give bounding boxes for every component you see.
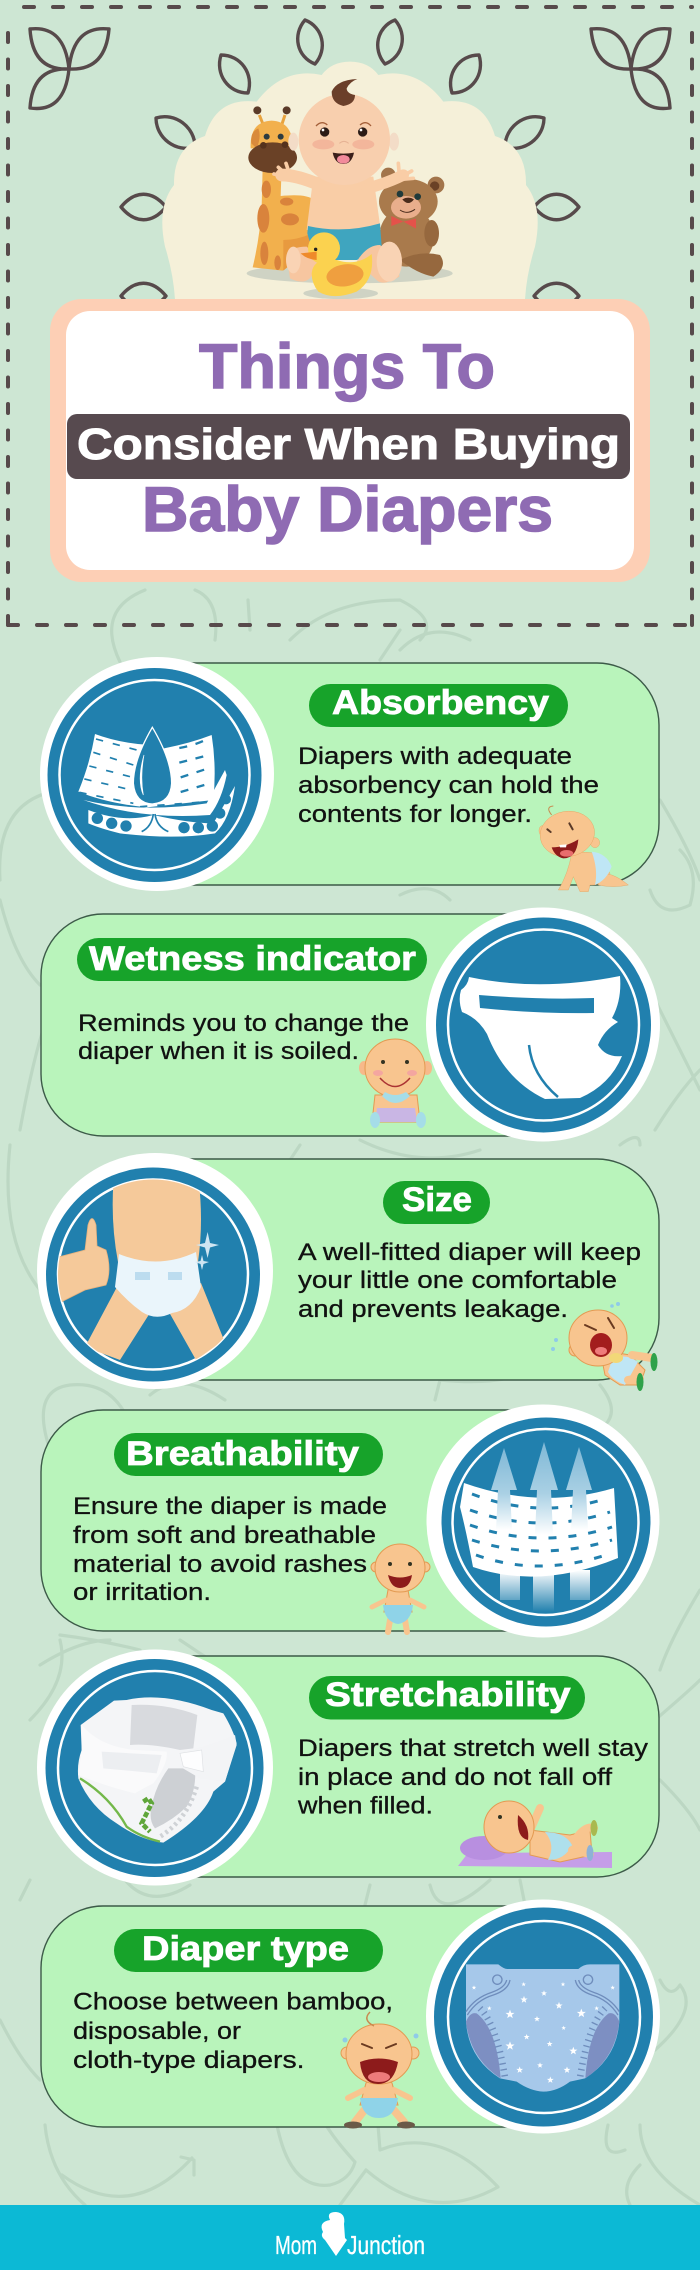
rubber duck xyxy=(301,232,378,299)
heading: Size xyxy=(402,1181,472,1219)
icon: baby lying on pillow xyxy=(458,1801,612,1868)
panel: absorbency xyxy=(40,657,659,892)
logo wordmark right: Junction xyxy=(347,2230,425,2260)
footer band xyxy=(0,2205,700,2270)
description: or irritation. xyxy=(73,1579,211,1606)
description: disposable, or xyxy=(73,2018,241,2045)
logo wordmark left: Mom xyxy=(275,2230,317,2260)
card xyxy=(100,663,659,885)
heading pill xyxy=(309,684,568,727)
title line 2: Consider When Buying xyxy=(77,420,620,469)
card xyxy=(100,1159,659,1380)
description: Reminds you to change the xyxy=(78,1010,409,1037)
card xyxy=(41,1410,600,1631)
heading: Absorbency xyxy=(332,684,549,722)
card xyxy=(100,1656,659,1877)
heading pill xyxy=(114,1929,383,1972)
icon: standing happy baby xyxy=(371,1544,430,1632)
dashed header frame xyxy=(8,7,692,625)
cream scalloped backdrop xyxy=(162,62,538,299)
description: Diapers that stretch well stay xyxy=(298,1735,648,1762)
baby xyxy=(274,79,413,283)
icon: open diaper photo xyxy=(37,1650,273,1886)
description xyxy=(298,743,599,828)
icon: sitting baby with bib xyxy=(359,1039,432,1128)
title line 3: Baby Diapers xyxy=(142,475,553,545)
icon: cloth diaper with stars xyxy=(426,1900,660,2134)
panel: wetness indicator xyxy=(41,908,660,1142)
heading pill xyxy=(77,938,427,981)
icon: absorbent pad with water drop xyxy=(40,657,274,891)
description xyxy=(297,1735,648,1820)
description xyxy=(73,1988,393,2074)
heading: Stretchability xyxy=(325,1676,571,1714)
teddy bear xyxy=(379,168,444,277)
ground shadow xyxy=(247,263,453,283)
heading: Diaper type xyxy=(142,1930,349,1968)
panel: size xyxy=(37,1153,659,1391)
description: from soft and breathable xyxy=(73,1522,376,1549)
heading: Wetness indicator xyxy=(89,940,416,978)
heading pill xyxy=(114,1433,383,1476)
title panel xyxy=(50,299,650,582)
panel: diaper type xyxy=(41,1900,660,2134)
logo mark: mother and child xyxy=(322,2212,347,2256)
card xyxy=(41,1906,600,2127)
description: absorbency can hold the xyxy=(298,772,599,799)
panel fill xyxy=(66,311,634,570)
description: A well-fitted diaper will keep xyxy=(298,1239,641,1266)
icon: crawling baby xyxy=(536,806,628,892)
highlight bar xyxy=(67,414,630,479)
description xyxy=(73,1493,387,1606)
giraffe toy xyxy=(248,106,314,271)
description: when filled. xyxy=(297,1792,433,1820)
decorative leaves: left xyxy=(30,20,322,309)
panel: stretchability xyxy=(37,1650,659,1886)
panel: breathability xyxy=(41,1404,660,1638)
description xyxy=(298,1239,641,1323)
card xyxy=(41,914,600,1136)
heading pill xyxy=(309,1676,585,1720)
description xyxy=(78,1010,409,1065)
description: Choose between bamboo, xyxy=(73,1988,393,2016)
icon: crying baby lying down xyxy=(551,1302,658,1391)
description: diaper when it is soiled. xyxy=(78,1038,359,1065)
title line 1: Things To xyxy=(199,332,495,402)
hero illustration: baby with toys xyxy=(247,79,453,299)
logo: MomJunction xyxy=(275,2212,425,2260)
decorative leaves: right xyxy=(378,20,670,309)
icon: diaper xyxy=(426,908,660,1142)
description: cloth-type diapers. xyxy=(73,2047,304,2074)
panel border xyxy=(50,299,650,582)
icon: baby in well-fitted diaper with thumbs up xyxy=(37,1153,273,1389)
heading pill xyxy=(383,1181,490,1224)
description: Ensure the diaper is made xyxy=(73,1493,387,1520)
description: your little one comfortable xyxy=(298,1267,617,1294)
description: Diapers with adequate xyxy=(298,743,572,770)
icon: breathable sheet with airflow arrows xyxy=(426,1404,660,1638)
description: contents for longer. xyxy=(298,801,532,828)
icon: crying standing baby xyxy=(341,2012,419,2128)
description: and prevents leakage. xyxy=(298,1296,568,1323)
description: in place and do not fall off xyxy=(298,1764,612,1791)
background pattern xyxy=(0,590,700,2205)
heading: Breathability xyxy=(126,1435,359,1473)
description: material to avoid rashes xyxy=(73,1551,367,1578)
